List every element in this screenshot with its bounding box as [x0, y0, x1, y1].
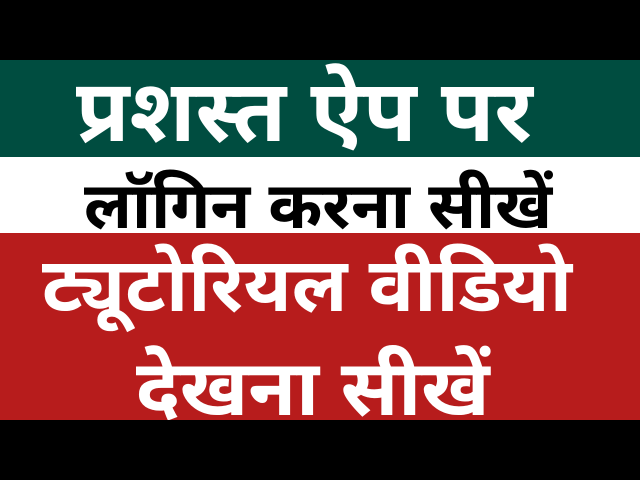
heading: red band first line: ट्यूटोरियल वीडियो [42, 244, 572, 328]
top black bar [0, 0, 640, 60]
text block: white band subtitle: लॉगिन करना सीखें [84, 169, 552, 242]
panel: green band [0, 60, 640, 157]
heading: green band title: प्रशस्त ऐप पर [76, 63, 533, 160]
panel: white band [0, 157, 640, 233]
heading: red band second line: देखना सीखें [136, 344, 490, 432]
bottom black bar [0, 420, 640, 480]
panel: red band [0, 233, 640, 420]
